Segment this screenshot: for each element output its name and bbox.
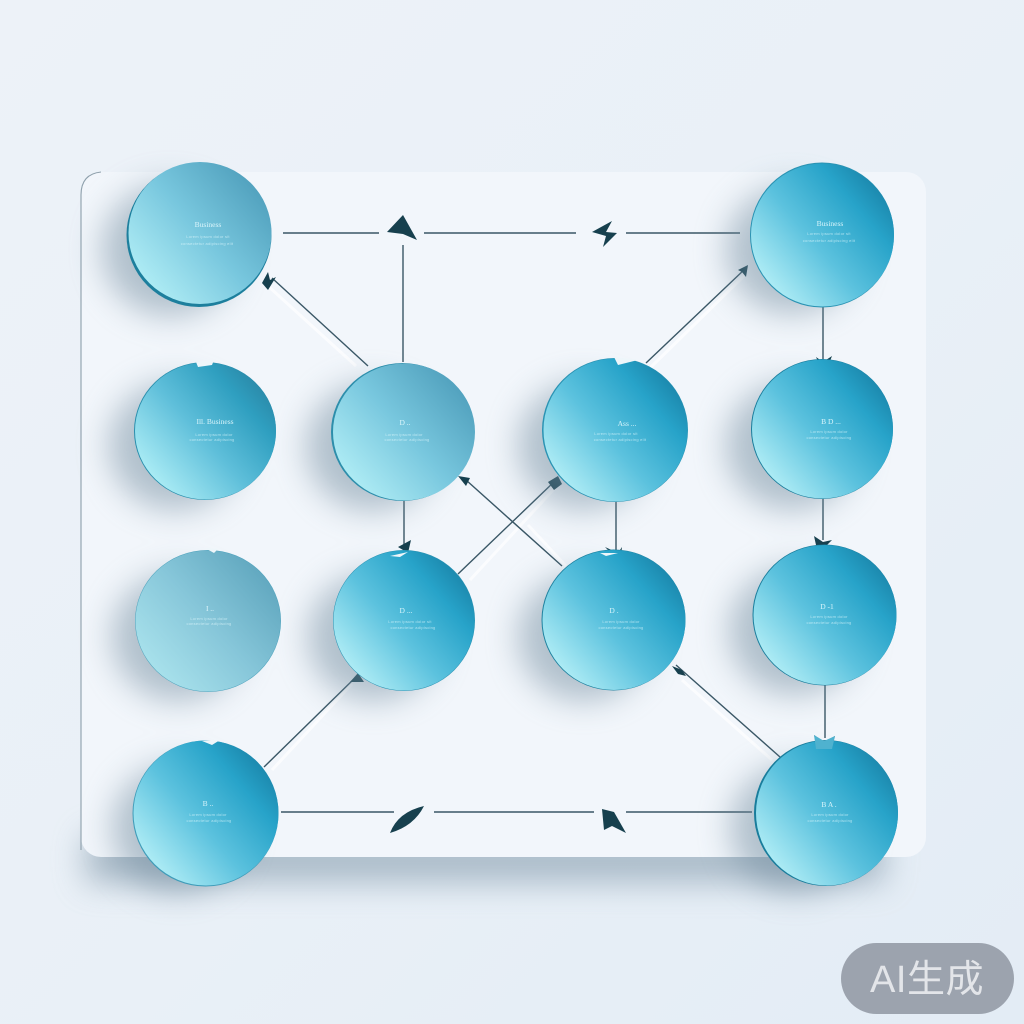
circle node 8 [333,550,475,691]
circle node 4: consectetur adipiscing [384,437,430,442]
circle node 9: Lorem ipsum dolor [602,619,640,624]
circle node 11: B .. [203,799,213,808]
circle node 3: Lorem ipsum dolor [195,432,233,437]
circle node 4: D .. [399,418,411,427]
circle node 9: D . [609,606,619,615]
bottom row connectors [281,806,752,833]
white panel [81,172,926,857]
panel shadow [85,835,885,883]
circle node 1 [126,162,272,307]
circle node 6 [751,359,893,499]
circle node 10: consectetur adipiscing [806,620,852,625]
circle node 11: consectetur adipiscing [186,818,232,823]
circle node 7: I .. [206,604,214,613]
circle node 2: Business [817,219,843,228]
circle node 12: Lorem ipsum dolor [811,812,849,817]
circle node 6: Lorem ipsum dolor [810,429,848,434]
circle node 12 [754,735,898,886]
connector lines and arrows [262,215,835,833]
circle node 3: consectetur adipiscing [189,437,235,442]
circle node 4: Lorem ipsum dolor [385,432,423,437]
circle node 6: consectetur adipiscing [806,435,852,440]
circle node 10: Lorem ipsum dolor [810,614,848,619]
circle shadows [102,184,862,892]
circle node 4 [331,363,475,501]
top row connectors [283,215,740,362]
circle node 3 [134,360,276,500]
circle node 5: consectetur adipiscing elit [594,437,647,442]
lower diagonals [264,665,780,770]
circle node 7 [135,548,281,692]
circle node 6: B D ... [821,417,841,426]
upper diagonals [262,265,748,368]
circle node 10: D -1 [820,602,834,611]
circle node 9: consectetur adipiscing [598,625,644,630]
AI generated badge: AI生成 [870,959,984,1001]
circle node 1: Business [195,220,221,229]
circle node 12: consectetur adipiscing [807,818,853,823]
circle node 5 [542,357,688,502]
circle node 11: Lorem ipsum dolor [189,812,227,817]
circle node 5: Ass ... [618,419,636,428]
circle node 2: Lorem ipsum dolor sit [807,231,851,236]
circle node 3: Ill. Business [196,417,234,426]
circle node 5: Lorem ipsum dolor sit [594,431,638,436]
circle node 1: Lorem ipsum dolor sit [186,234,230,239]
circle node 8: D ... [400,606,413,615]
circle node 2: consectetur adipiscing elit [803,238,856,243]
circle node 8: consectetur adipiscing [390,625,436,630]
circle node 8: Lorem ipsum dolor sit [388,619,432,624]
vertical connectors [398,307,835,750]
circle node 12: B A . [821,800,837,809]
circle node 1: consectetur adipiscing elit [181,241,234,246]
centre cross [458,476,566,580]
circle node 7: consectetur adipiscing [186,621,232,626]
circle node 10 [752,544,896,686]
AI generated badge [841,943,1014,1014]
circle node 2 [750,162,894,308]
circle node 9 [542,550,686,690]
circle node 11 [132,740,278,886]
circle node 7: Lorem ipsum dolor [190,616,228,621]
